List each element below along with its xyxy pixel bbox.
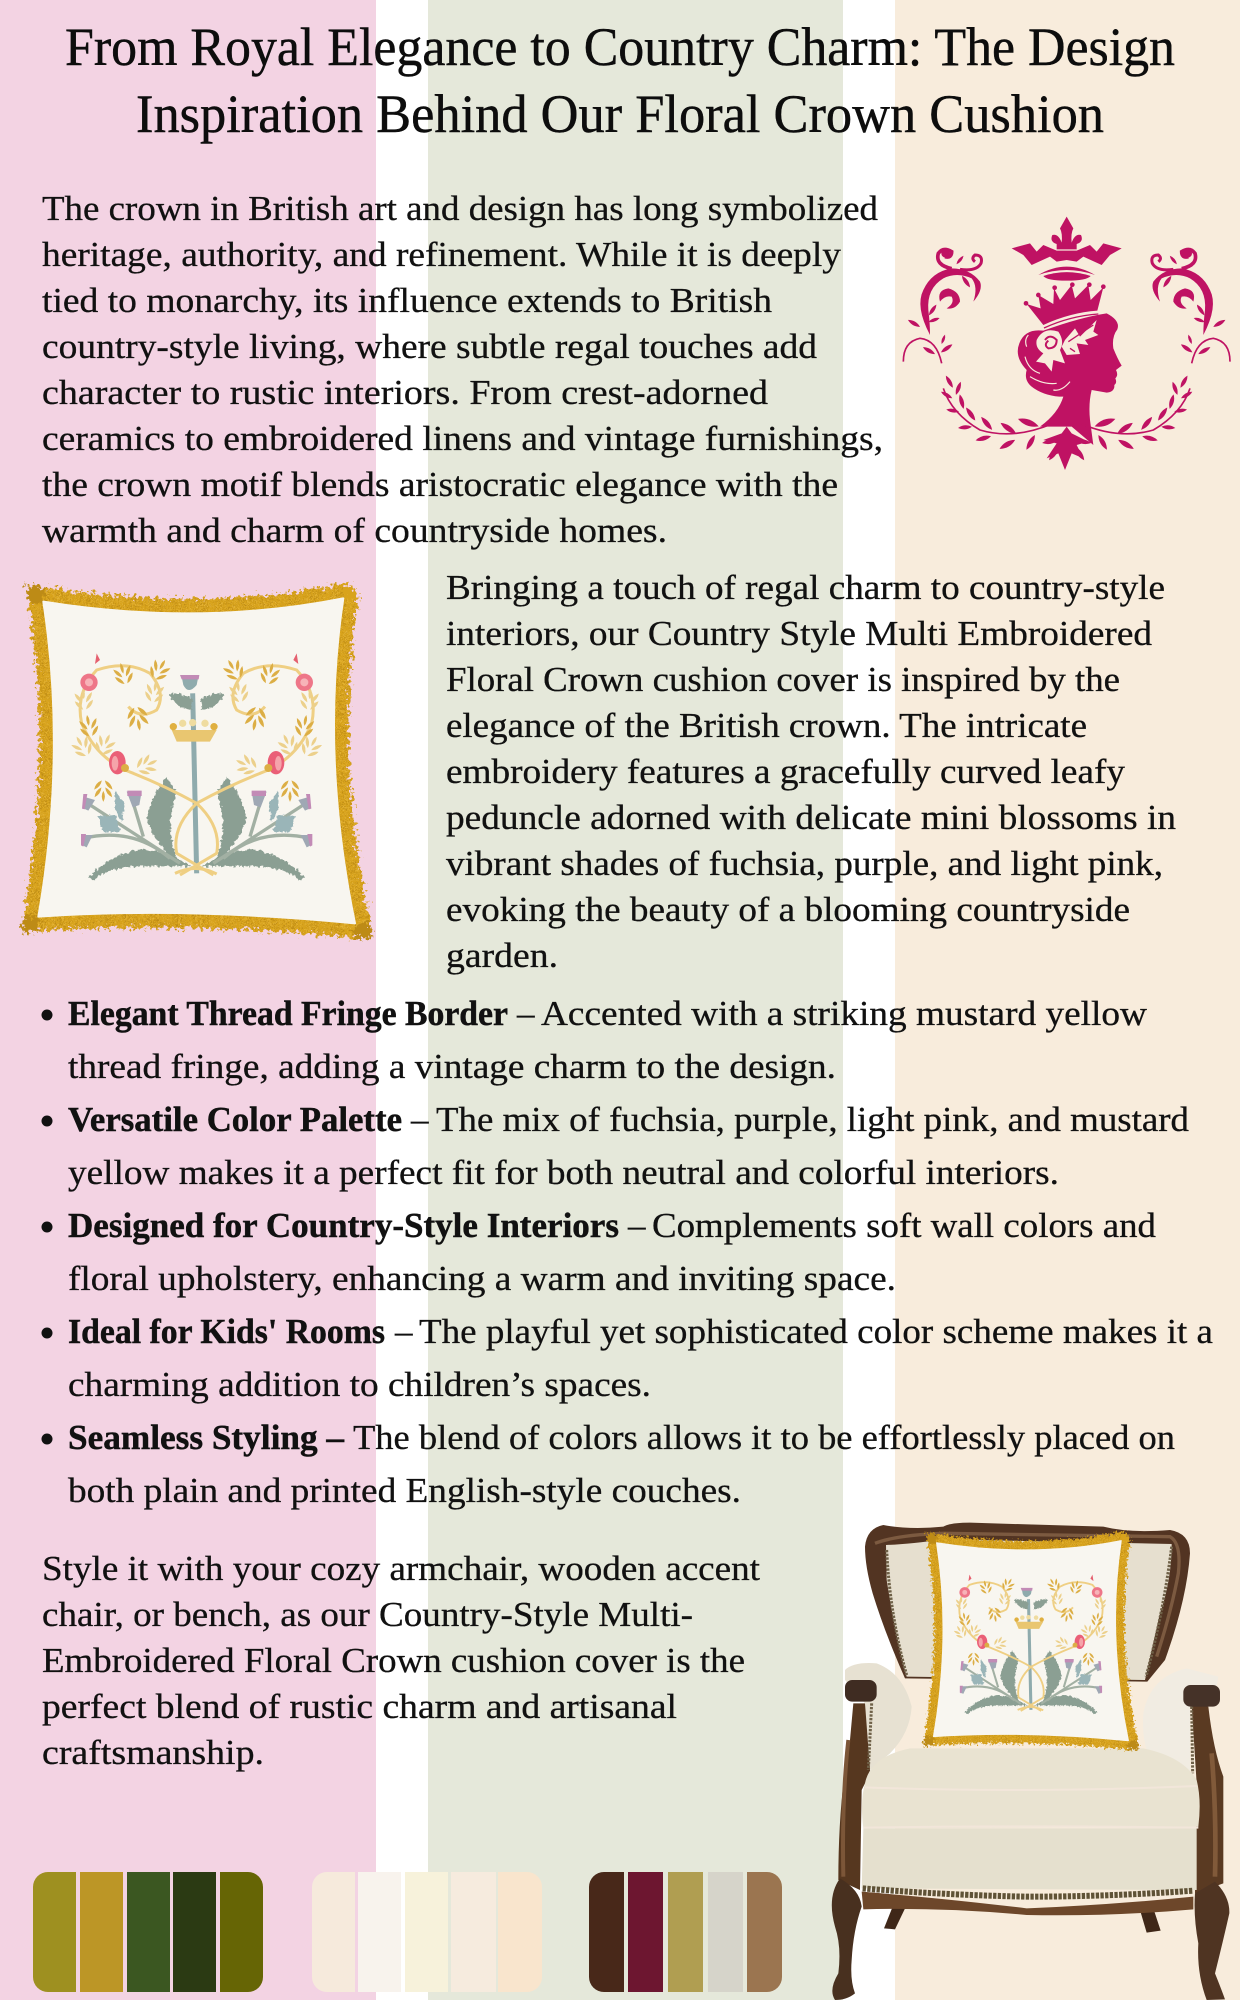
text block: cushion description: garden. — [446, 936, 558, 975]
photo: floral crown cushion — [38, 598, 355, 923]
text block: cushion description: embroidery features a gracefully curved leafy — [446, 752, 1126, 791]
text block: crown in British design — [42, 189, 883, 550]
bullet: kids rooms: – — [394, 1312, 413, 1351]
text block: crown in British design: heritage, authority, and refinement. While it is deeply — [42, 235, 842, 274]
text block: cushion description: elegance of the British crown. The intricate — [446, 706, 1087, 745]
colour palette: browns and burgundy — [589, 1872, 782, 1992]
text block: cushion description: peduncle adorned with delicate mini blossoms in — [446, 798, 1176, 837]
bullet: colour palette — [42, 1100, 1190, 1192]
icon: queen crown medallion — [903, 217, 1230, 470]
text block: crown in British design: character to rustic interiors. From crest-adorned — [42, 373, 769, 412]
bullet: thread fringe: Elegant Thread Fringe Border — [68, 994, 508, 1033]
bullet: kids rooms: charming addition to children’s spaces. — [68, 1365, 651, 1404]
photo: armchair with cushion — [832, 1523, 1229, 2000]
text block: crown in British design: the crown motif blends aristocratic elegance with the — [42, 465, 838, 504]
text block: cushion description — [446, 568, 1176, 975]
chair legs — [832, 1878, 1229, 2000]
text block: styling suggestion: craftsmanship. — [42, 1733, 264, 1772]
top crown — [1012, 217, 1122, 281]
title: Inspiration Behind Our Floral Crown Cushion — [136, 84, 1104, 144]
bullet: seamless styling: Seamless Styling – — [68, 1418, 344, 1457]
cushion on chair — [934, 1541, 1128, 1741]
bullet: thread fringe: thread fringe, adding a vintage charm to the design. — [68, 1047, 836, 1086]
text block: styling suggestion: chair, or bench, as our Country-Style Multi- — [42, 1595, 693, 1634]
bullet: colour palette: – — [410, 1100, 429, 1139]
wreath and flourish — [903, 249, 1061, 462]
colour palette: greens and golds — [33, 1872, 263, 1992]
bullet: thread fringe: Accented with a striking mustard yellow — [541, 994, 1148, 1033]
text block: crown in British design: warmth and charm of countryside homes. — [42, 511, 667, 550]
text block: cushion description: vibrant shades of fuchsia, purple, and light pink, — [446, 844, 1163, 883]
bullet: thread fringe — [42, 994, 1148, 1086]
bullet: seamless styling: The blend of colors allows it to be effortlessly placed on — [353, 1418, 1175, 1457]
text block: crown in British design: ceramics to embroidered linens and vintage furnishings, — [42, 419, 883, 458]
bullet: kids rooms: The playful yet sophisticated color scheme makes it a — [419, 1312, 1213, 1351]
chair back — [865, 1523, 1190, 1933]
text block: styling suggestion: Embroidered Floral Crown cushion cover is the — [42, 1641, 745, 1680]
bullet: seamless styling — [42, 1418, 1175, 1510]
bullet: colour palette: yellow makes it a perfect fit for both neutral and colorful interiors. — [68, 1153, 1059, 1192]
bullet: country-style interiors: Complements soft wall colors and — [652, 1206, 1157, 1245]
text block: styling suggestion: Style it with your cozy armchair, wooden accent — [42, 1549, 760, 1588]
bullet: country-style interiors — [42, 1206, 1157, 1298]
text block: cushion description: Bringing a touch of regal charm to country-style — [446, 568, 1165, 607]
bullet: kids rooms — [42, 1312, 1213, 1404]
text block: cushion description: interiors, our Country Style Multi Embroidered — [446, 614, 1153, 653]
text block: crown in British design: tied to monarchy, its influence extends to British — [42, 281, 773, 320]
text block: cushion description: evoking the beauty of a blooming countryside — [446, 890, 1130, 929]
bullet: colour palette: The mix of fuchsia, purple, light pink, and mustard — [436, 1100, 1190, 1139]
text block: crown in British design: The crown in British art and design has long symbolized — [42, 189, 879, 228]
bullet: country-style interiors: – — [627, 1206, 646, 1245]
colour palette: creams — [312, 1872, 542, 1992]
bullet list: features — [42, 994, 1213, 1510]
woman's profile — [1018, 313, 1122, 445]
text block: crown in British design: country-style living, where subtle regal touches add — [42, 327, 818, 366]
bullet: thread fringe: – — [516, 994, 535, 1033]
head crown — [1024, 282, 1106, 328]
chair arms — [838, 1663, 1223, 1893]
bullet: colour palette: Versatile Color Palette — [68, 1100, 402, 1139]
bullet: seamless styling: both plain and printed English-style couches. — [68, 1471, 741, 1510]
title: From Royal Elegance to Country Charm: The Design — [65, 17, 1175, 77]
bullet: country-style interiors: Designed for Country-Style Interiors — [68, 1206, 619, 1245]
text block: cushion description: Floral Crown cushion cover is inspired by the — [446, 660, 1120, 699]
text block: styling suggestion: perfect blend of rustic charm and artisanal — [42, 1687, 677, 1726]
bullet: country-style interiors: floral upholstery, enhancing a warm and inviting space. — [68, 1259, 896, 1298]
seat — [862, 1748, 1200, 1915]
bottom ornament — [1043, 427, 1088, 470]
bullet: kids rooms: Ideal for Kids' Rooms — [68, 1312, 385, 1351]
title — [65, 17, 1175, 144]
text block: styling suggestion — [42, 1549, 760, 1772]
